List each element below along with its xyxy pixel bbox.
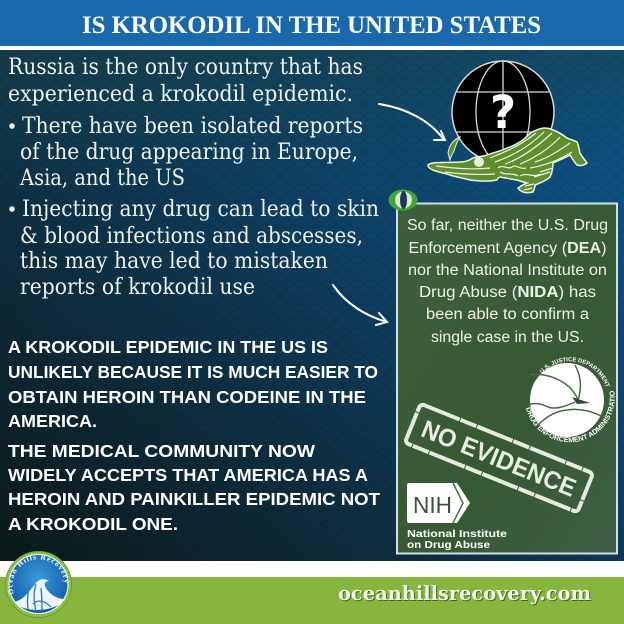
panel text: nor the National Institute on: [408, 262, 607, 279]
bold statement: medical community: HEROIN AND PAINKILLER EPIDEMIC NOT: [8, 489, 380, 509]
panel text: Enforcement Agency ( DEA): [408, 240, 606, 257]
bullet: isolated reports: of the drug appearing in Europe,: [20, 140, 358, 165]
bullet: isolated reports: There have been isolated reports: [22, 114, 363, 139]
footer website: oceanhillsrecovery.com: [338, 581, 591, 605]
logo: NIH: [407, 483, 507, 551]
footer band: [0, 561, 624, 624]
logo: Ocean Hills Recovery: [5, 551, 72, 618]
bold statement: epidemic unlikely: A KROKODIL EPIDEMIC IN THE US IS: [8, 337, 328, 357]
bold statement: epidemic unlikely: OBTAIN HEROIN THAN CODEINE IN THE: [8, 387, 366, 407]
intro text line 2: experienced a krokodil epidemic.: [8, 82, 353, 107]
intro text: Russia is the only country that has: [8, 55, 363, 80]
icon: crocodile: [428, 128, 587, 193]
icon: DEA seal: [526, 357, 615, 442]
icon: eye: [388, 190, 418, 210]
logo: NIH: on Drug Abuse: [407, 539, 490, 551]
bullet: injecting infections: & blood infections and abscesses,: [20, 224, 363, 249]
panel text: Drug Abuse ( NIDA) has: [419, 284, 596, 301]
bold statement: medical community: A KROKODIL ONE.: [8, 514, 178, 534]
panel text: been able to confirm a: [426, 306, 589, 323]
logo: NIH: NIH: [413, 492, 452, 518]
header banner: [0, 0, 624, 50]
panel text: So far, neither the U.S. Drug: [407, 217, 608, 234]
bold statement: epidemic unlikely: AMERICA.: [8, 411, 97, 431]
bullet: injecting infections: this may have led to mistaken: [20, 249, 328, 274]
bullet: isolated reports: Asia, and the US: [19, 166, 185, 191]
icon: DEA seal: DRUG ENFORCEMENT ADMINISTRATION: [526, 390, 615, 442]
arrow: to globe: [379, 104, 445, 140]
icon: DEA seal: U.S. JUSTICE DEPARTMENT: [539, 357, 610, 386]
stamp: no evidence: NO EVIDENCE: [417, 415, 580, 503]
panel text: [407, 217, 608, 346]
panel text: single case in the US.: [431, 329, 584, 346]
bold statement: epidemic unlikely: UNLIKELY BECAUSE IT IS MUCH EASIER TO: [8, 362, 378, 382]
icon: globe with question mark: [452, 61, 554, 163]
bold statement: epidemic unlikely: [8, 337, 378, 431]
bullet: injecting infections: Injecting any drug can lead to skin: [22, 197, 379, 222]
logo: Ocean Hills Recovery: Ocean Hills Recovery: [8, 555, 68, 594]
bullet: injecting infections: reports of krokodil use: [20, 275, 255, 300]
icon: globe with question mark: ?: [490, 86, 516, 139]
title: IS KROKODIL IN THE UNITED STATES: [82, 12, 541, 39]
bullet: injecting infections: [9, 197, 379, 300]
bullet: isolated reports: [9, 114, 363, 191]
bold statement: medical community: [8, 441, 380, 534]
logo: NIH: National Institute: [407, 528, 507, 540]
bold statement: medical community: WIDELY ACCEPTS THAT AMERICA HAS A: [8, 465, 368, 485]
arrow: to evidence panel: [333, 285, 387, 325]
bold statement: medical community: THE MEDICAL COMMUNITY NOW: [8, 441, 316, 461]
